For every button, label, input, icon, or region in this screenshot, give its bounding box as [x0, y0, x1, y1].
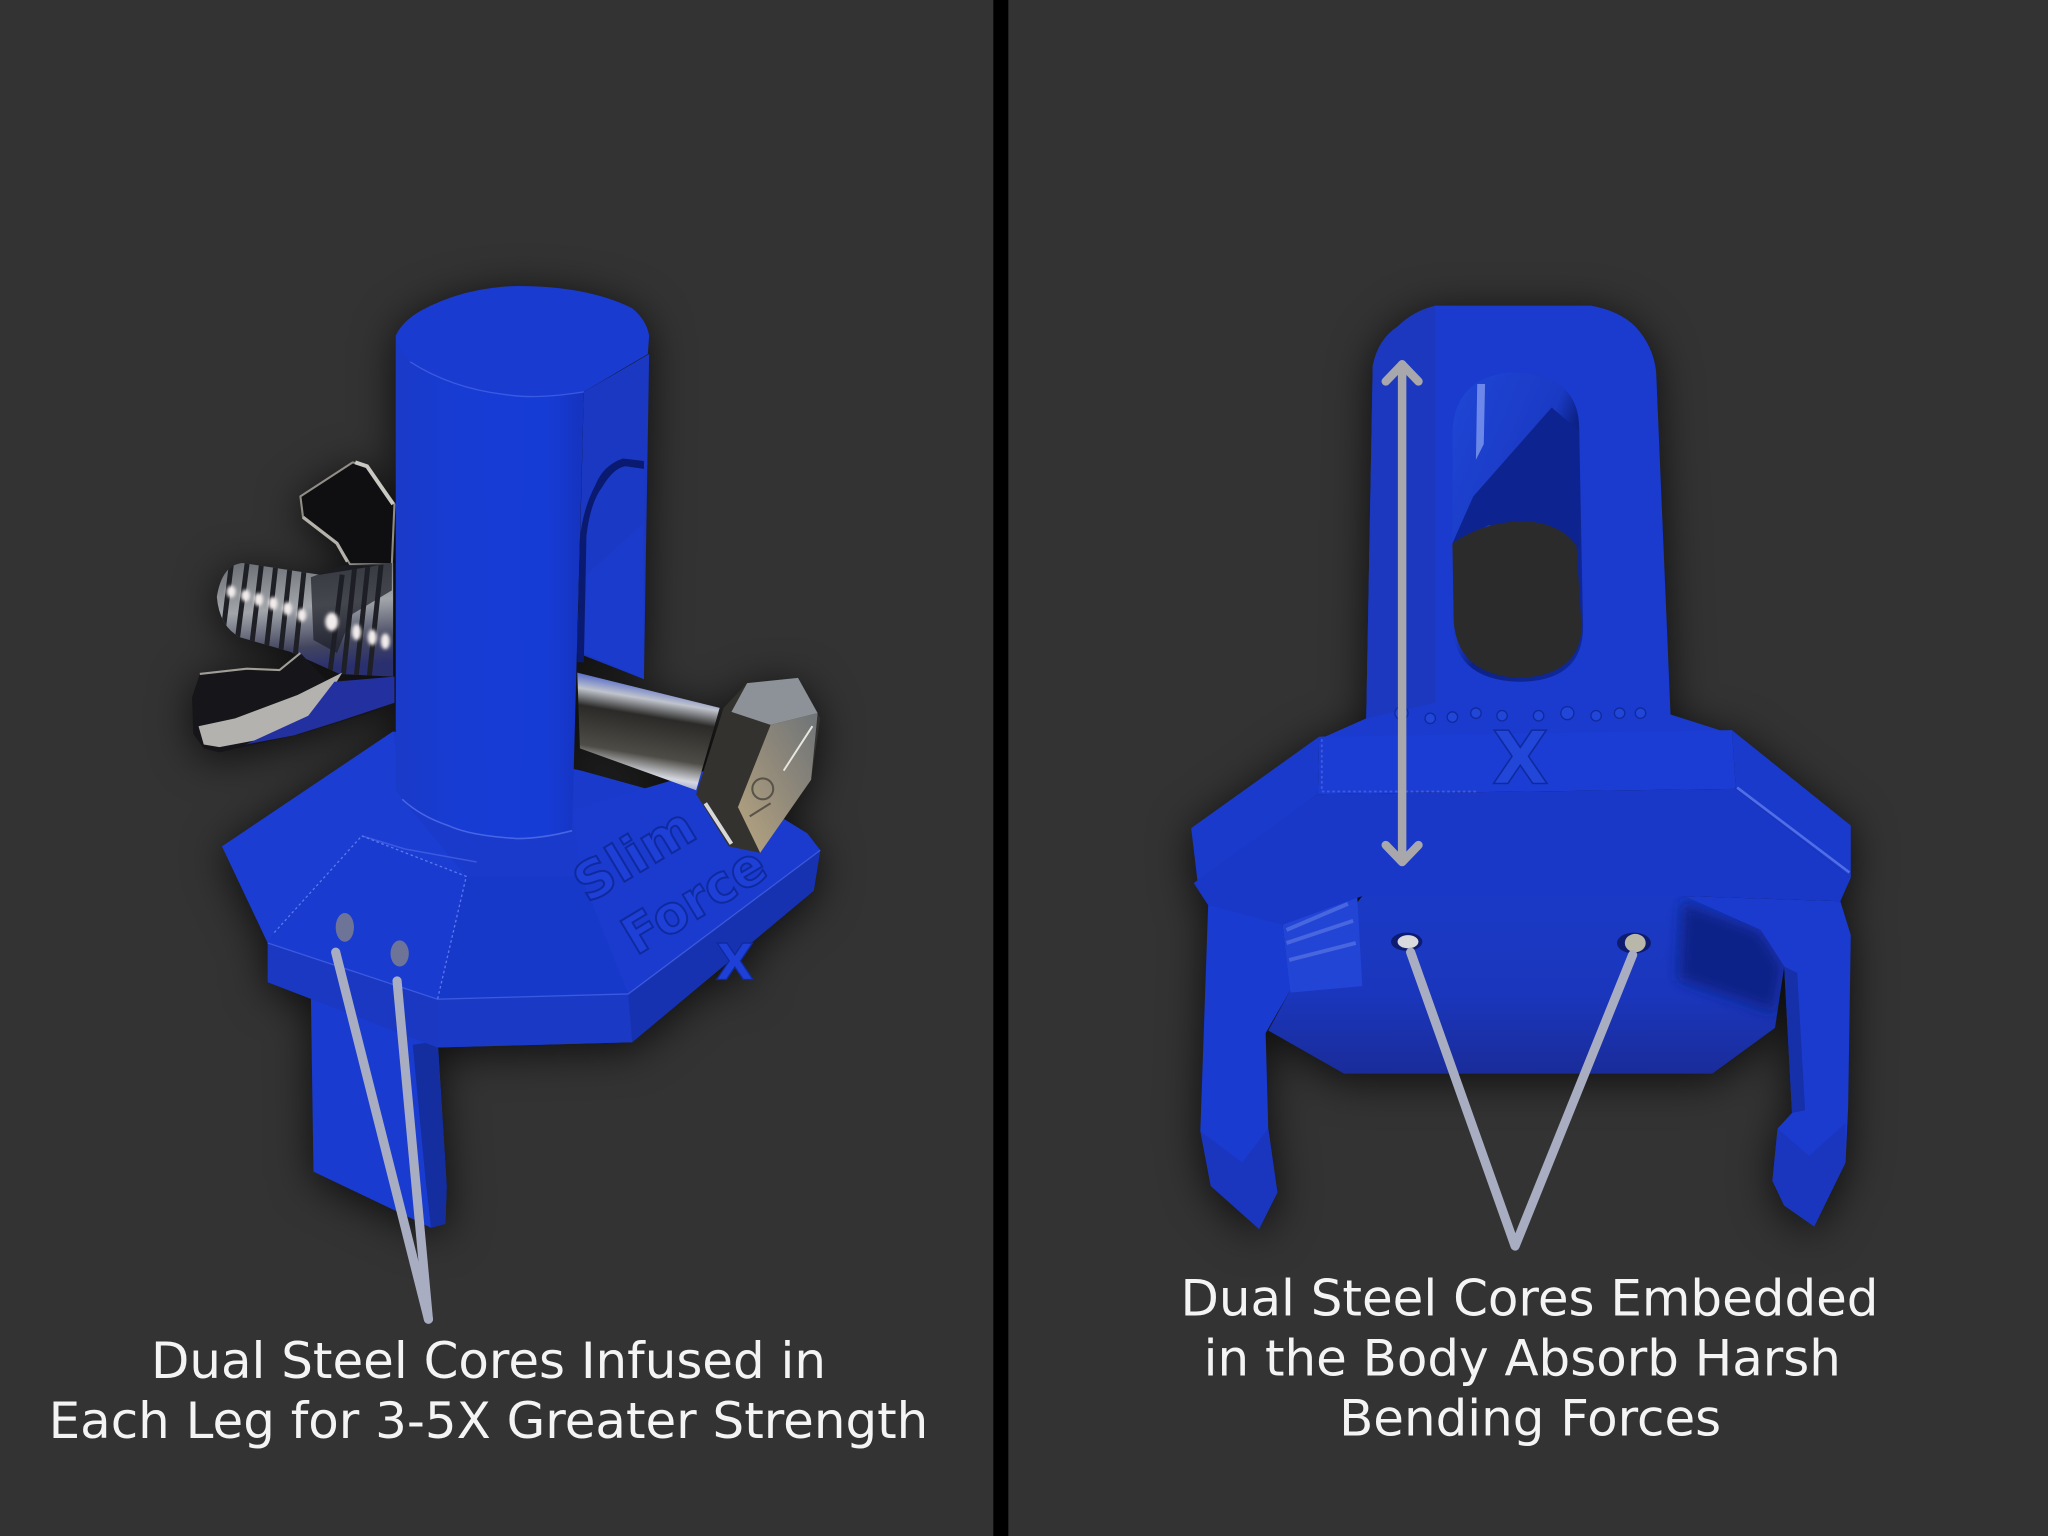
double-headed height arrow: [1386, 364, 1418, 862]
embossed lettering on base: Slim: [564, 796, 706, 915]
cylinder post: [396, 286, 649, 839]
pointer lines to right steel cores: [1411, 952, 1633, 1246]
embossed bumps along stem base: [1395, 707, 1646, 724]
panel: right photo of part underside: [1191, 306, 1851, 1229]
see-through hole: [1452, 521, 1582, 678]
caption: right: in the Body Absorb Harsh: [1204, 1329, 1841, 1387]
stem slot interior: [1452, 372, 1583, 682]
threaded stud and wing nut hub: [217, 555, 393, 686]
upper stem: [1319, 306, 1732, 739]
octagonal base faces: [1191, 730, 1851, 925]
embossed X mark: X: [716, 934, 754, 992]
underside plate: [1268, 893, 1784, 1074]
caption: left: [49, 1332, 928, 1450]
wing nut front wing: [192, 653, 394, 752]
bolt head marking: [750, 778, 773, 816]
caption: right: Bending Forces: [1339, 1389, 1721, 1447]
embossed lettering on base: [564, 796, 777, 967]
leg below base: [311, 993, 447, 1228]
caption: right: [1180, 1269, 1878, 1447]
octagonal base: [222, 731, 820, 1048]
top face: [396, 286, 649, 397]
pointer lines to left steel cores: [336, 952, 428, 1319]
lower left leg: [1194, 883, 1362, 1229]
wing nut back wing: [300, 462, 394, 564]
caption: left: Dual Steel Cores Infused in: [151, 1332, 826, 1390]
embossed lettering on base: Force: [612, 835, 777, 967]
steel core ends on left part: [336, 913, 409, 967]
lower right leg: [1684, 896, 1851, 1226]
divider: [993, 0, 1008, 1536]
panel: left photo of leg part with wing nut and bolt: [192, 286, 820, 1228]
slot shading: [584, 522, 644, 679]
steel core ends on right part: [1391, 933, 1651, 953]
caption: left: Each Leg for 3-5X Greater Strength: [49, 1392, 928, 1450]
hex bolt: [577, 673, 820, 853]
caption: right: Dual Steel Cores Embedded: [1180, 1269, 1878, 1327]
thread highlights: [227, 586, 390, 649]
embossed X on right part: X: [1492, 717, 1549, 802]
